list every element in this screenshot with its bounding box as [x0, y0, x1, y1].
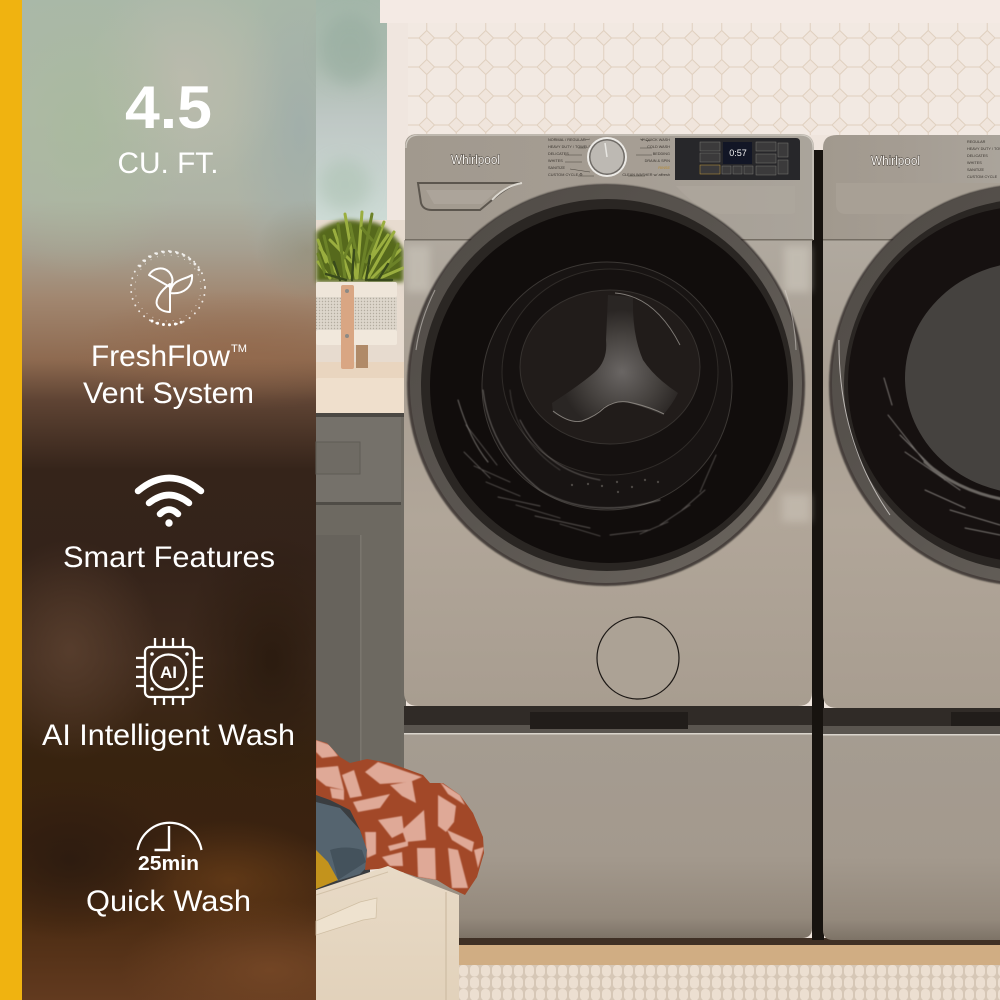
- feature label: AI Intelligent Wash: AI Intelligent Wash: [42, 719, 295, 752]
- side highlights: [406, 246, 810, 522]
- drum opening: [905, 262, 1000, 494]
- cycle labels left: NORMAL / REGULAR: [548, 138, 586, 142]
- left washer: [404, 134, 814, 706]
- backsplash behind planter: [316, 220, 406, 364]
- control display: 0:57: [729, 148, 747, 158]
- control display: [675, 138, 800, 180]
- yellow towel: [316, 850, 338, 889]
- blue towel: [316, 802, 372, 881]
- washer body: [404, 240, 812, 706]
- door glass: [430, 209, 788, 563]
- upper cabinet: [380, 0, 1000, 23]
- plant foliage: [316, 212, 404, 282]
- cycle labels right: COLD WASH: [647, 145, 670, 149]
- top control fascia: [823, 135, 1000, 240]
- detergent drawer: [418, 183, 522, 210]
- canvas bin: [316, 866, 459, 1000]
- cycle labels: WHITES: [967, 161, 982, 165]
- door gasket shadow: [829, 184, 1000, 586]
- icon: 25 minute clock: [138, 823, 202, 875]
- washer body: [823, 240, 1000, 708]
- gap between washers: [812, 150, 824, 940]
- cycle labels left: DELICATES: [548, 152, 569, 156]
- brand logo: Whirlpool: [871, 154, 920, 168]
- cycle labels: [967, 140, 1000, 179]
- cycle labels right: BEDDING: [653, 152, 670, 156]
- cycle labels: REGULAR: [967, 140, 986, 144]
- door glass: [848, 206, 1000, 562]
- floor: [316, 938, 1000, 967]
- drawer recess: [836, 183, 1000, 214]
- counter: [316, 362, 406, 413]
- door outer ring: [832, 185, 1000, 583]
- laundry bin with towels: [316, 735, 488, 1000]
- door gasket shadow: [407, 184, 805, 586]
- feature label: Smart Features: Smart Features: [63, 541, 275, 574]
- cycle labels left: SANITIZE: [548, 166, 566, 170]
- bin handle: [316, 898, 377, 935]
- striped towel: [316, 735, 488, 900]
- cycle labels left: [548, 138, 591, 177]
- dark interior: [316, 795, 370, 892]
- cycle labels left: HEAVY DUTY / TOWELS: [548, 145, 591, 149]
- brand logo: Whirlpool: [451, 153, 500, 167]
- blurred feature panel: [22, 0, 316, 1000]
- feature label: Quick Wash: Quick Wash: [86, 885, 251, 918]
- yellow side bar: [0, 0, 22, 1000]
- window trim: [387, 15, 408, 365]
- cycle labels right: RINSE: [658, 166, 670, 170]
- baffle: [552, 295, 678, 422]
- capacity unit: CU. FT.: [118, 147, 218, 180]
- cycle labels right: CLEAN WASHER w/ affresh: [622, 173, 670, 177]
- right washer: [823, 135, 1000, 708]
- door ring highlight: [416, 290, 796, 350]
- tile backsplash: [408, 23, 1000, 135]
- right pedestal: [823, 708, 1000, 940]
- glass streaks: [884, 378, 1000, 535]
- planter basket: [316, 282, 397, 369]
- left pedestal: [404, 706, 812, 938]
- cycle labels right: [622, 138, 670, 177]
- window view: [316, 0, 388, 220]
- cycle labels left: WHITES: [548, 159, 563, 163]
- feature label: FreshFlow Vent System: [83, 340, 254, 410]
- planter with plant: [316, 212, 404, 369]
- icon: 25 minute clock: 25min: [138, 853, 199, 875]
- icon: AI chip: AI: [160, 663, 177, 682]
- lower service panel: [597, 617, 679, 699]
- cabinet: [316, 413, 406, 773]
- wall background: [316, 0, 1000, 1000]
- cycle labels: DELICATES: [967, 154, 988, 158]
- icon: AI chip: [136, 638, 203, 705]
- cycle labels: SANITIZE: [967, 168, 985, 172]
- cycle labels right: 4" QUICK WASH: [641, 138, 670, 142]
- selector dial: [587, 137, 627, 177]
- door outer ring: [410, 185, 802, 583]
- capacity number: 4.5: [125, 74, 212, 141]
- feature label: FreshFlow Vent System: Vent System: [83, 377, 254, 410]
- cycle labels right: DRAIN & SPIN: [645, 159, 670, 163]
- icon: wifi: [138, 478, 201, 527]
- cycle labels left: CUSTOM CYCLE ⚙: [548, 173, 583, 177]
- top control fascia: [405, 134, 814, 240]
- cycle labels: CUSTOM CYCLE: [967, 175, 998, 179]
- feature label: FreshFlow Vent System: TM: [231, 343, 247, 355]
- capacity stat: [118, 74, 218, 180]
- drum perforations: [571, 479, 659, 493]
- recess below display: [676, 186, 795, 214]
- drum: [458, 262, 732, 536]
- icon: FreshFlow fan: [126, 246, 210, 330]
- rug: [458, 965, 1000, 1000]
- glass highlights: [458, 390, 716, 536]
- feature label: FreshFlow Vent System: FreshFlow: [91, 340, 231, 373]
